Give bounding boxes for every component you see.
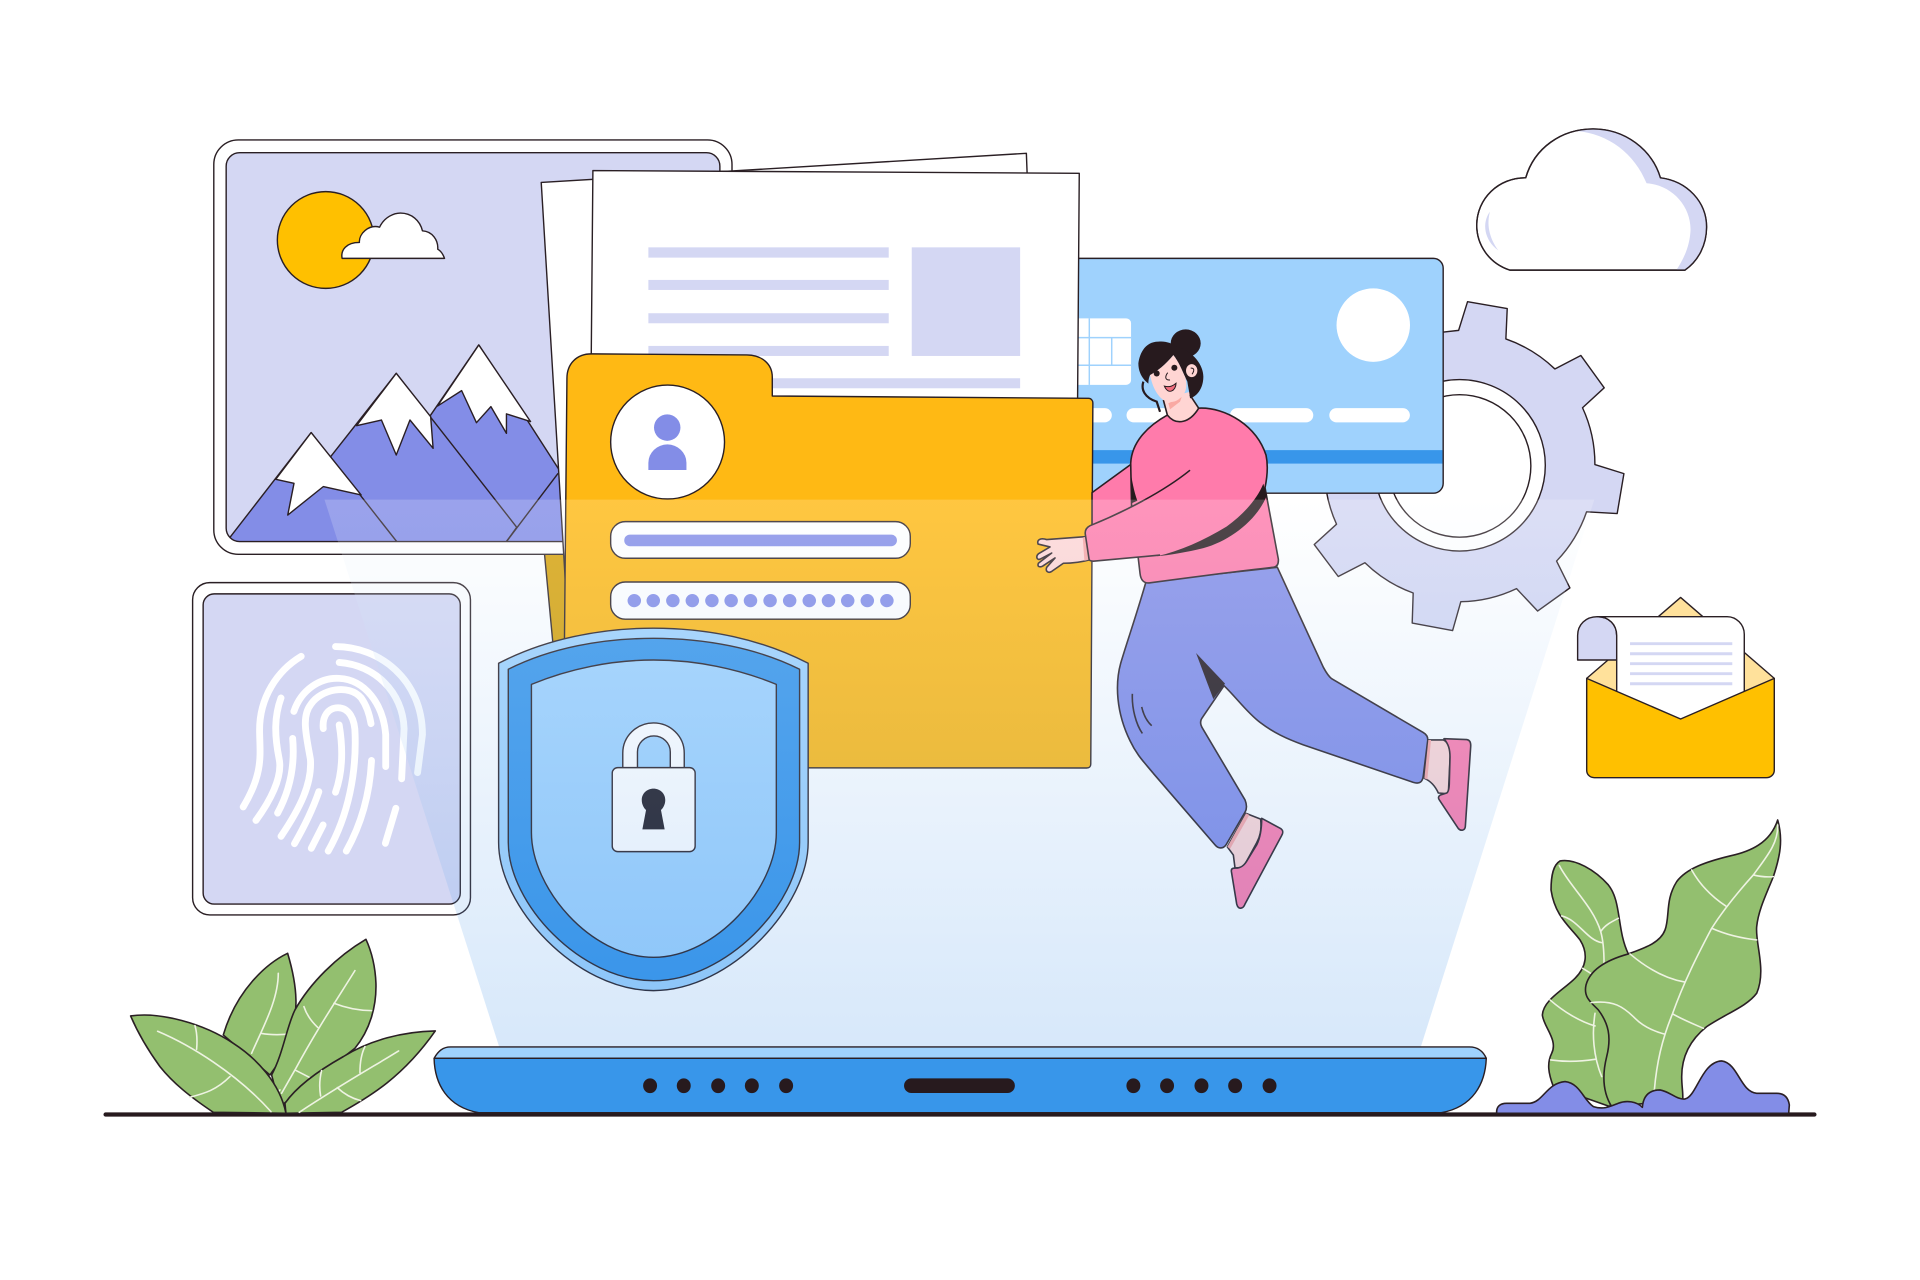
right ankle shade bbox=[1424, 740, 1431, 780]
trouser crease shadow bbox=[1196, 653, 1225, 699]
sleeve outline bbox=[1085, 470, 1190, 561]
folder back panel bbox=[543, 539, 582, 643]
face bbox=[1150, 355, 1186, 402]
document page bbox=[591, 171, 1079, 404]
icon: gear bbox=[1310, 302, 1624, 631]
keyhole bbox=[642, 789, 665, 829]
ear bbox=[1186, 364, 1197, 377]
hair bun bbox=[1171, 329, 1201, 357]
mountains bbox=[230, 344, 562, 541]
sleeve fill bbox=[1085, 470, 1190, 561]
left ankle bbox=[1227, 813, 1261, 868]
nose bbox=[1166, 373, 1170, 380]
icon: cloud bbox=[1477, 129, 1707, 270]
panel: fingerprint tablet bbox=[193, 583, 470, 915]
left ankle shade bbox=[1227, 813, 1249, 849]
icon: open envelope with letter bbox=[1578, 597, 1774, 778]
sweater torso bbox=[1131, 408, 1278, 583]
card logo circle bbox=[1337, 288, 1410, 362]
security shield with padlock bbox=[499, 628, 808, 991]
icon: fingerprint bbox=[243, 647, 422, 851]
back sheet of paper bbox=[541, 153, 1053, 588]
neck outline bbox=[1163, 395, 1199, 415]
laptop base bbox=[434, 1047, 1486, 1113]
folder with profile form bbox=[563, 354, 1093, 768]
charging port bbox=[904, 1078, 1015, 1093]
document image placeholder bbox=[912, 247, 1020, 356]
icon: padlock bbox=[612, 723, 695, 852]
left speaker dots bbox=[643, 1078, 793, 1093]
right speaker dots bbox=[1126, 1078, 1277, 1093]
avatar circle bbox=[611, 385, 725, 499]
purple mound bbox=[1497, 1061, 1789, 1113]
hand bbox=[1037, 537, 1089, 572]
card chip bbox=[1065, 318, 1131, 385]
icon: small cloud bbox=[342, 213, 444, 258]
plant: left leaves bbox=[131, 939, 435, 1113]
eyes bbox=[1154, 365, 1177, 377]
plant: right leaves with mound bbox=[1497, 820, 1789, 1113]
hair bbox=[1138, 341, 1203, 398]
card number bars bbox=[1078, 408, 1410, 422]
knee folds bbox=[1132, 694, 1152, 733]
icon: sun bbox=[277, 192, 374, 288]
right ankle bbox=[1424, 740, 1450, 794]
hair strand bbox=[1143, 382, 1160, 412]
mouth bbox=[1164, 383, 1176, 391]
cuff shade bbox=[1083, 537, 1089, 561]
bag strap back bbox=[1130, 469, 1137, 503]
right shoe bbox=[1439, 739, 1471, 830]
trousers bbox=[1117, 567, 1428, 848]
back arm bbox=[1092, 464, 1137, 529]
bag strap front bbox=[1157, 484, 1267, 556]
neck blush bbox=[1168, 397, 1182, 409]
projected light beam bbox=[324, 500, 1594, 1048]
username field bbox=[611, 522, 910, 558]
ground line bbox=[103, 1112, 1817, 1117]
credit card bbox=[1041, 258, 1443, 493]
left shoe bbox=[1231, 818, 1283, 908]
panel: landscape picture bbox=[214, 140, 732, 554]
card stripe bbox=[1053, 450, 1442, 464]
password field bbox=[611, 582, 910, 619]
character: woman holding folder bbox=[1037, 329, 1471, 908]
document text lines bbox=[648, 247, 1020, 388]
neck bbox=[1163, 392, 1199, 422]
illustration: data security scene bbox=[104, 128, 1816, 1117]
